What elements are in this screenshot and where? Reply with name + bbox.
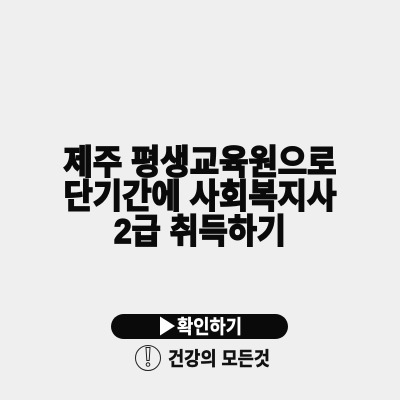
caption text: 건강의 모든것 [168, 348, 270, 370]
title: 2급 취득하기 [114, 213, 286, 251]
title [64, 144, 336, 251]
caption with warning icon [136, 346, 270, 370]
button: 확인하기 [111, 314, 288, 339]
title: 제주 평생교육원으로 [64, 144, 336, 182]
title: 단기간에 사회복지사 [64, 178, 336, 216]
icon: play triangle [160, 316, 175, 336]
button label: 확인하기 [177, 316, 242, 338]
icon: exclamation in circle [136, 346, 160, 370]
